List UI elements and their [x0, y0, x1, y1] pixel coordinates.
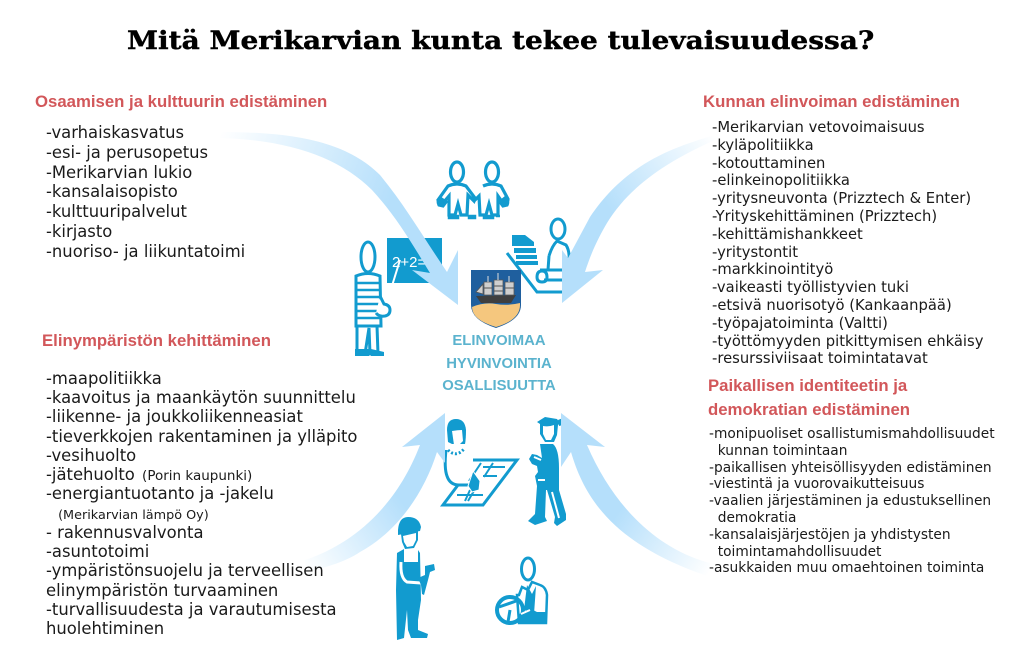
list: huolehtiminen: [46, 619, 164, 638]
icon: teacher at blackboard: [355, 238, 442, 356]
list: -turvallisuudesta ja varautumisesta: [46, 600, 337, 619]
list: -asuntotoimi: [46, 542, 149, 561]
list: -tieverkkojen rakentaminen ja ylläpito: [46, 427, 357, 446]
icon: construction worker with hammer: [396, 517, 435, 640]
list: -työttömyyden pitkittymisen ehkäisy: [712, 333, 983, 350]
heading: Kunnan elinvoiman edistäminen: [703, 92, 960, 111]
panel: Osaamisen ja kulttuurin edistäminen: [35, 92, 327, 261]
icon: teacher at blackboard: 2+2=: [392, 254, 426, 271]
list: -asukkaiden muu omaehtoinen toiminta: [709, 560, 984, 576]
list: - rakennusvalvonta: [46, 523, 204, 542]
list: (Merikarvian lämpö Oy): [58, 508, 209, 523]
list: toimintamahdollisuudet: [718, 544, 881, 560]
list: -monipuoliset osallistumismahdollisuudet: [709, 426, 995, 442]
icon: person reading books at desk: [507, 219, 569, 292]
list: [712, 119, 983, 367]
list: -resurssiviisaat toimintatavat: [712, 350, 928, 367]
list: -Merikarvian lukio: [46, 163, 192, 182]
heading: [708, 376, 910, 419]
arrow: top right: [562, 135, 715, 303]
arrow: bottom right: [561, 413, 710, 577]
list: -kehittämishankkeet: [712, 226, 863, 243]
list: [46, 123, 245, 261]
list: -yritystontit: [712, 244, 798, 261]
list: -kotouttaminen: [712, 155, 825, 172]
list: -esi- ja perusopetus: [46, 143, 208, 162]
icon: two children holding hands: [438, 162, 508, 218]
list: -kirjasto: [46, 222, 112, 241]
list: -kyläpolitiikka: [712, 137, 814, 154]
list: -kansalaisopisto: [46, 182, 178, 201]
panel: Paikallisen identiteetin ja demokratian edistäminen: [708, 376, 995, 576]
arrow: bottom left: [305, 413, 445, 572]
list: -etsivä nuorisotyö (Kankaanpää): [712, 297, 952, 314]
icon: person at steering wheel: [497, 558, 547, 624]
central text: ELINVOIMAA: [452, 333, 546, 349]
list: -liikenne- ja joukkoliikenneasiat: [46, 407, 303, 426]
list: -kulttuuripalvelut: [46, 202, 187, 221]
icon: municipal crest with ship: [471, 270, 521, 328]
title: Mitä Merikarvian kunta tekee tulevaisuudessa?: [127, 26, 874, 55]
list: -yritysneuvonta (Prizztech & Enter): [712, 190, 971, 207]
list: -viestintä ja vuorovaikutteisuus: [709, 476, 924, 492]
list: -nuoriso- ja liikuntatoimi: [46, 242, 245, 261]
list: -vaikeasti työllistyvien tuki: [712, 279, 909, 296]
central text: OSALLISUUTTA: [442, 378, 556, 394]
list: -maapolitiikka: [46, 369, 162, 388]
list: elinympäristön turvaaminen: [46, 581, 278, 600]
list: -Yrityskehittäminen (Prizztech): [712, 208, 937, 225]
central text: HYVINVOINTIA: [446, 356, 552, 372]
list: -vaalien järjestäminen ja edustuksellinen: [709, 493, 991, 509]
panel: Elinympäristön kehittäminen: [42, 331, 357, 638]
list: -kaavoitus ja maankäytön suunnittelu: [46, 388, 356, 407]
heading: demokratian edistäminen: [708, 400, 910, 419]
list: kunnan toimintaan: [718, 443, 847, 459]
central text: [442, 333, 556, 394]
list: [46, 369, 357, 638]
heading: Osaamisen ja kulttuurin edistäminen: [35, 92, 327, 111]
icon: woman with map: [443, 419, 517, 505]
arrow: top left: [220, 132, 458, 305]
list: demokratia: [718, 510, 796, 526]
list: -jätehuolto (Porin kaupunki): [46, 465, 252, 484]
icon: walking worker with cap: [528, 417, 566, 526]
list: -työpajatoiminta (Valtti): [712, 315, 888, 332]
panel: Kunnan elinvoiman edistäminen: [703, 92, 983, 367]
list: [709, 426, 995, 576]
heading: Elinympäristön kehittäminen: [42, 331, 271, 350]
list: -energiantuotanto ja -jakelu: [46, 484, 274, 503]
list: -ympäristönsuojelu ja terveellisen: [46, 561, 324, 580]
list: -vesihuolto: [46, 446, 136, 465]
list: -markkinointityö: [712, 261, 833, 278]
heading: Paikallisen identiteetin ja: [708, 376, 907, 395]
list: -varhaiskasvatus: [46, 123, 184, 142]
list: -elinkeinopolitiikka: [712, 172, 850, 189]
list: -Merikarvian vetovoimaisuus: [712, 119, 925, 136]
list: -paikallisen yhteisöllisyyden edistäminen: [709, 460, 992, 476]
list: -kansalaisjärjestöjen ja yhdistysten: [709, 527, 951, 543]
